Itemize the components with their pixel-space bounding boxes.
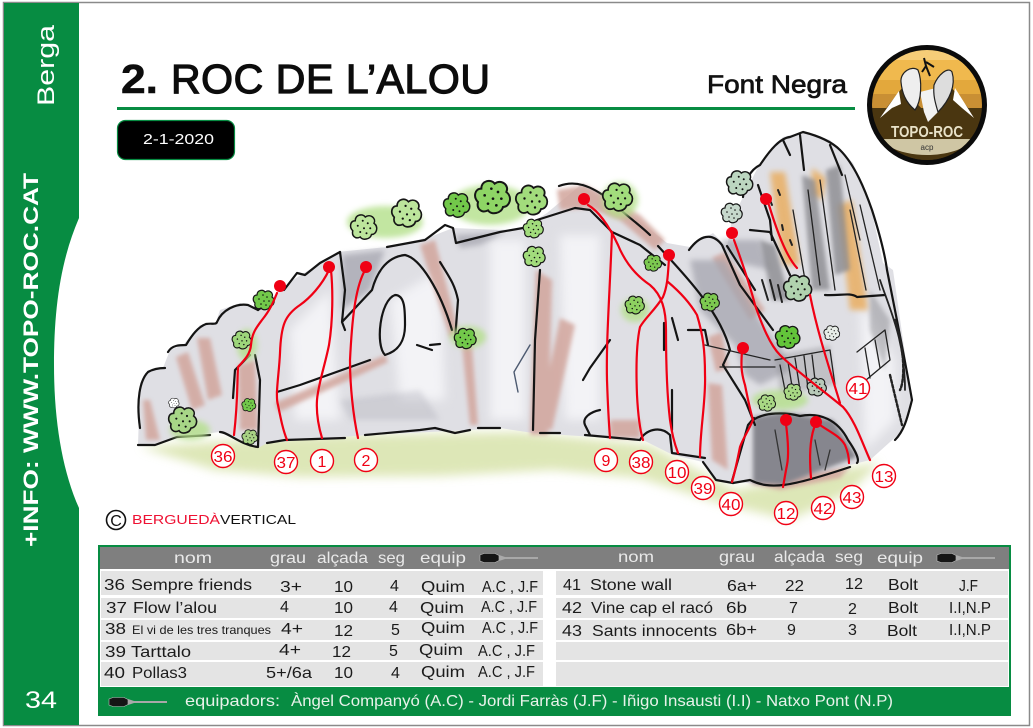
route 39 row: 12 — [332, 644, 351, 661]
route number labels: 1 — [318, 454, 327, 471]
route 36 row — [104, 577, 538, 596]
route 40 row: A.C , J.F — [478, 664, 535, 681]
route 40 row: 40 — [104, 665, 125, 682]
route number labels: 42 — [814, 501, 833, 518]
route number labels: 10 — [668, 465, 687, 482]
route 41 row: Stone wall — [590, 577, 672, 594]
route 43 row: Sants innocents — [592, 623, 717, 640]
route 39 row: Quim — [419, 642, 463, 659]
title rule — [117, 107, 855, 110]
orange wash on tower — [770, 168, 868, 310]
green sidebar — [4, 3, 79, 725]
route number labels: 9 — [602, 453, 611, 470]
route 41 row: Bolt — [888, 577, 919, 594]
route 38 row: 12 — [334, 623, 353, 640]
route number labels: 12 — [776, 506, 796, 523]
title: ROC DE L’ALOU — [171, 56, 490, 102]
table header: equip — [877, 550, 923, 567]
route 43 row: I.I,N.P — [949, 622, 991, 639]
table header: seg — [835, 549, 863, 566]
route 36 row: 36 — [104, 577, 125, 594]
route 36 row: 10 — [334, 579, 353, 596]
logo subtitle: acp — [921, 143, 934, 152]
route number labels: 37 — [276, 455, 296, 472]
area name: Berga — [33, 24, 60, 106]
white highlights — [290, 235, 895, 450]
route 37 row — [106, 599, 537, 617]
logo wordmark: TOPO-ROC — [891, 124, 963, 141]
route 40 row: 4 — [391, 665, 400, 682]
routes 42 and 43 — [810, 416, 849, 478]
route 38 row: El vi de les tres tranques — [132, 623, 271, 637]
route 38 row: Quim — [421, 620, 465, 637]
climbing routes — [234, 193, 870, 487]
route number labels: 13 — [874, 469, 894, 486]
route 37 row: A.C , J.F — [481, 599, 537, 616]
copyright mark: C — [110, 513, 122, 530]
route 40 row — [104, 664, 535, 682]
route 43 row: 3 — [848, 622, 857, 639]
date badge — [118, 120, 234, 160]
table header: nom — [618, 549, 654, 566]
route 39 row: 5 — [389, 643, 398, 660]
cave shadow — [753, 412, 857, 485]
route 41 — [760, 193, 840, 403]
reddish rock bands — [143, 185, 850, 490]
green wash behind bushes — [170, 182, 808, 440]
route 2 — [350, 261, 372, 438]
crag illustration — [138, 132, 912, 520]
date badge: 2-1-2020 — [143, 131, 214, 148]
route 40 row: 5+/6a — [266, 665, 312, 682]
route 38 row: 5 — [391, 622, 400, 639]
route 40 row: 10 — [334, 665, 353, 682]
route 40 row: Quim — [421, 664, 465, 681]
route 42 row — [562, 600, 991, 618]
route number labels: 43 — [842, 490, 862, 507]
route 41 row: 6a+ — [727, 578, 757, 595]
route 42 row: 6b — [726, 600, 747, 617]
climber figure — [922, 58, 934, 76]
gray rock washes — [340, 232, 790, 420]
routes 9 and 10 — [578, 193, 678, 453]
rock body — [138, 132, 912, 487]
route 42 row: Vine cap el racó — [591, 600, 713, 617]
copyright mark — [106, 510, 296, 530]
route 41 row: 22 — [785, 578, 804, 595]
rock ink outlines — [138, 132, 912, 486]
route 43 row: 6b+ — [726, 622, 757, 639]
route 39 row: A.C , J.F — [478, 643, 535, 660]
route number labels: 36 — [214, 449, 233, 466]
copyright mark: BERGUEDÀ — [132, 512, 220, 527]
bushes — [169, 171, 840, 444]
route 40 row: Pollas3 — [132, 665, 187, 682]
route 43 row: 43 — [562, 623, 582, 640]
route 43 row: Bolt — [887, 623, 918, 640]
route 36 — [234, 280, 286, 435]
route 37 row: 10 — [334, 600, 353, 617]
route 40 — [732, 342, 753, 482]
route 12 — [780, 414, 792, 487]
route 37 row: 37 — [106, 600, 127, 617]
route 37 row: 4 — [389, 599, 398, 616]
route number labels: 41 — [848, 381, 868, 398]
table header: equip — [420, 550, 466, 567]
route number labels: 2 — [362, 453, 371, 470]
route 38 row: 4+ — [281, 621, 303, 638]
route 13 — [726, 227, 870, 460]
ground wash — [140, 432, 880, 520]
route number labels: 38 — [632, 455, 651, 472]
routes table — [99, 546, 1010, 715]
route 42 row: 2 — [848, 601, 857, 618]
route 39 row: Tarttalo — [131, 644, 191, 661]
route 37 row: Quim — [420, 600, 464, 617]
route 37 row: 4 — [280, 599, 289, 616]
route 41 row: 12 — [845, 576, 863, 593]
route number labels: 40 — [722, 497, 741, 514]
route 41 row — [563, 576, 978, 595]
route 38 row — [105, 620, 538, 640]
route 39 row: 4+ — [279, 642, 301, 659]
copyright mark: VERTICAL — [220, 512, 296, 527]
routes 38 and 39 — [636, 249, 705, 457]
route number labels: 39 — [694, 481, 713, 498]
route 41 row: J.F — [959, 578, 978, 595]
route 37 row: Flow l’alou — [133, 600, 217, 617]
website link: +INFO: WWW.TOPO-ROC.CAT — [20, 173, 43, 547]
route 42 row: I.I,N.P — [949, 600, 991, 617]
route 42 row: 7 — [789, 600, 798, 617]
table header: alçada — [774, 549, 825, 566]
table header: nom — [174, 550, 212, 567]
route 38 row: A.C , J.F — [482, 620, 538, 637]
row backgrounds — [101, 571, 1008, 686]
route 43 row — [562, 622, 991, 640]
route 39 row — [105, 642, 535, 661]
routes 37 and 1 — [277, 261, 335, 440]
table header — [100, 547, 1009, 569]
equippers footer — [99, 687, 1010, 715]
page number: 34 — [25, 687, 57, 714]
dark tower washes — [760, 165, 890, 395]
TOPO-ROC logo — [867, 45, 987, 165]
equippers footer: Àngel Companyó (A.C) - Jordi Farràs (J.F) - Iñigo Insausti (I.I) - Natxo Pont (N.P) — [291, 691, 893, 710]
sector name: Font Negra — [707, 71, 847, 99]
route 38 row: 38 — [105, 621, 126, 638]
route 43 row: 9 — [787, 622, 796, 639]
route 36 row: Sempre friends — [131, 577, 252, 594]
tower thin detail — [705, 175, 905, 470]
table header: alçada — [317, 550, 368, 567]
table header: grau — [270, 550, 306, 567]
route 36 row: A.C , J.F — [482, 579, 538, 596]
route 41 row: 41 — [563, 577, 581, 594]
route 36 row: 3+ — [280, 579, 302, 596]
table header: grau — [719, 549, 755, 566]
route 36 row: 4 — [390, 578, 399, 595]
route 42 row: 42 — [562, 600, 582, 617]
route number labels — [212, 376, 896, 524]
equippers footer: equipadors: — [185, 693, 280, 710]
route 36 row: Quim — [421, 579, 465, 596]
title: 2. — [121, 56, 158, 102]
route 42 row: Bolt — [888, 600, 919, 617]
route 39 row: 39 — [105, 644, 126, 661]
table header: seg — [378, 550, 405, 567]
